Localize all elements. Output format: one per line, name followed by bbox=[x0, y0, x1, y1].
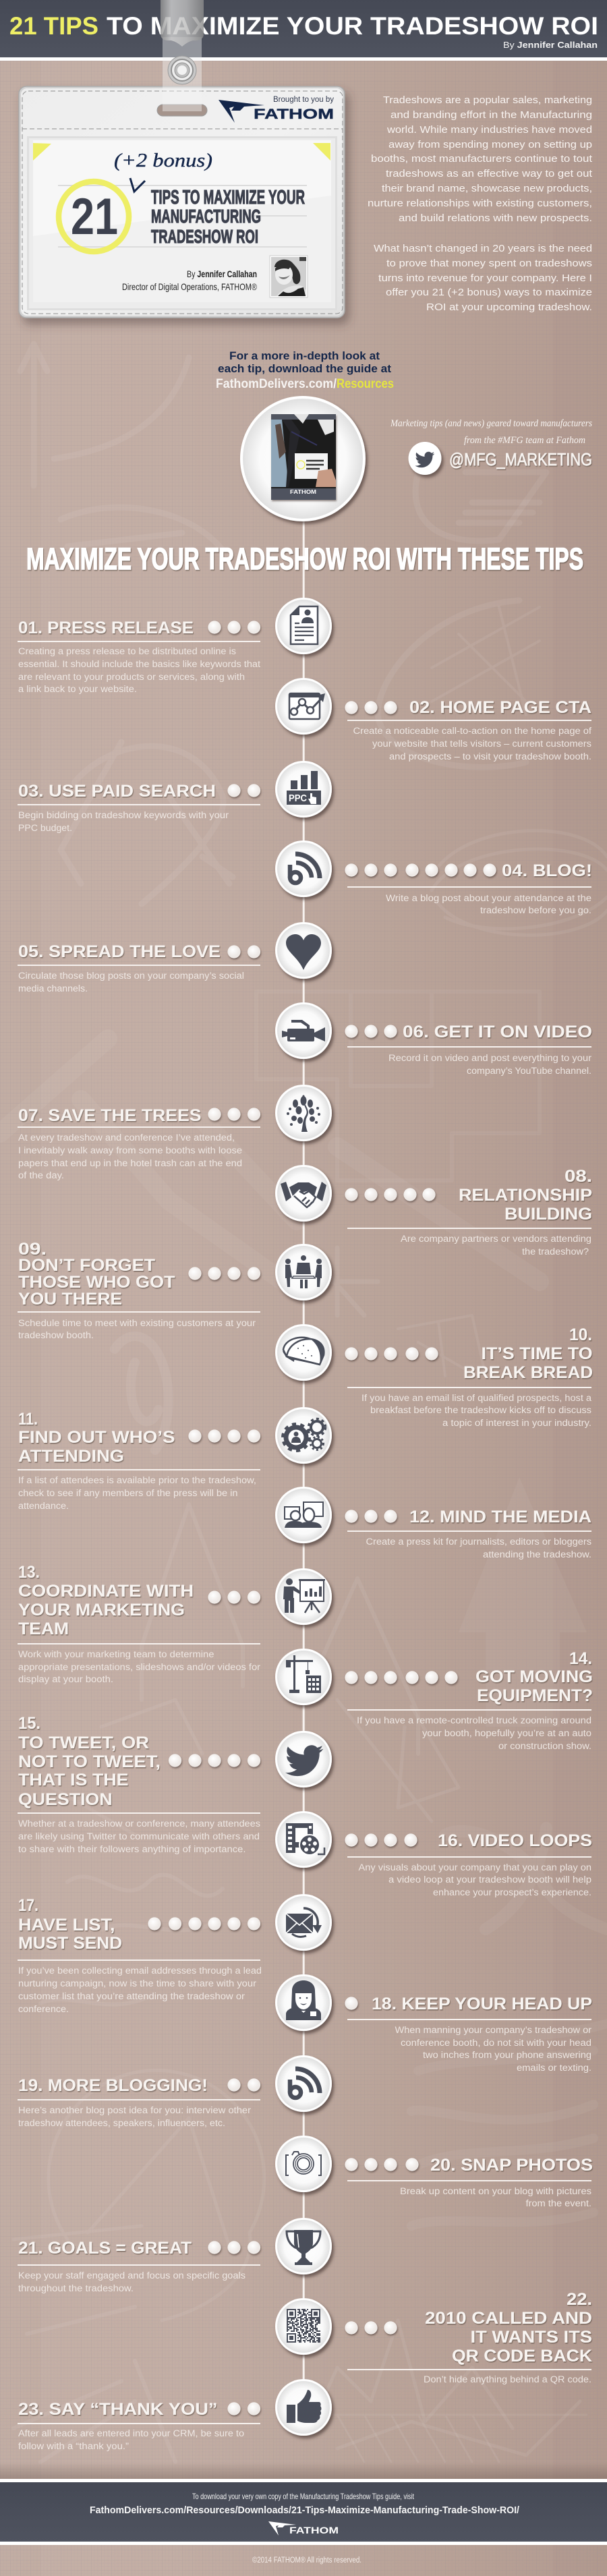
heading: NOT TO TWEET, bbox=[18, 1752, 161, 1771]
description: are likely using Twitter to communicate with others and bbox=[18, 1831, 260, 1841]
tip 03 bbox=[18, 761, 332, 833]
footer note: To download your very own copy of the Manufacturing Tradeshow Tips guide, visit bbox=[192, 2492, 415, 2501]
description bbox=[357, 1715, 591, 1751]
heading bbox=[18, 1563, 194, 1638]
twitter callout: from the #MFG team at Fathom bbox=[464, 435, 585, 446]
header bar bbox=[0, 0, 607, 61]
heading: 06. GET IT ON VIDEO bbox=[403, 1023, 592, 1041]
tip 05 bbox=[18, 922, 332, 994]
description bbox=[18, 1966, 262, 2014]
heading: 14. bbox=[569, 1649, 592, 1668]
description: enhance your prospect’s experience. bbox=[433, 1887, 591, 1897]
intro copy bbox=[368, 94, 593, 313]
description bbox=[401, 1234, 591, 1257]
description: your booth, hopefully you’re at an auto bbox=[422, 1728, 591, 1738]
author bbox=[122, 268, 258, 292]
description: When manning your company’s tradeshow or bbox=[395, 2025, 592, 2035]
heading: THAT IS THE bbox=[18, 1771, 128, 1790]
description: display at your booth. bbox=[18, 1674, 113, 1684]
description: Whether at a tradeshow or conference, many attendees bbox=[18, 1819, 260, 1829]
icon: thumbs up bbox=[275, 2379, 332, 2436]
heading: HAVE LIST, bbox=[18, 1916, 115, 1935]
central timeline line bbox=[303, 519, 305, 2408]
heading bbox=[18, 1714, 161, 1809]
description: Create a press kit for journalists, editors or bloggers bbox=[366, 1537, 591, 1547]
description: a link back to your website. bbox=[18, 684, 137, 694]
guide cover image: FATHOM bbox=[290, 489, 316, 495]
icon: presenter bbox=[275, 1568, 332, 1625]
tip 15 bbox=[18, 1714, 332, 1854]
tip 17 bbox=[18, 1894, 332, 2014]
dots bbox=[345, 2321, 397, 2335]
heading: 09. bbox=[18, 1240, 47, 1259]
description: appropriate presentations, slideshows and/or videos for bbox=[18, 1662, 261, 1672]
heading bbox=[18, 1410, 175, 1466]
sponsor logo: Brought to you by bbox=[273, 96, 334, 104]
heading: GOT MOVING bbox=[475, 1667, 593, 1686]
description bbox=[18, 2105, 252, 2128]
icon: photo camera bbox=[275, 2136, 332, 2192]
heading: 13. bbox=[18, 1563, 40, 1582]
heading: TEAM bbox=[18, 1620, 69, 1638]
dots bbox=[227, 784, 260, 797]
card heading: MANUFACTURING bbox=[151, 206, 261, 227]
intro copy: booths, most manufacturers continue to tout bbox=[371, 153, 593, 165]
tip 09 bbox=[18, 1240, 332, 1340]
description: your website that tells visitors – current customers bbox=[372, 739, 591, 749]
description: media channels. bbox=[18, 983, 88, 994]
description: or construction show. bbox=[498, 1741, 591, 1751]
heading: 03. USE PAID SEARCH bbox=[18, 782, 216, 801]
description: Work with your marketing team to determine bbox=[18, 1649, 214, 1659]
intro copy: What hasn’t changed in 20 years is the need bbox=[374, 243, 592, 254]
heading: 02. HOME PAGE CTA bbox=[409, 698, 591, 717]
tip 14 bbox=[275, 1649, 593, 1751]
description: to share with their followers anything of importance. bbox=[18, 1844, 245, 1854]
description bbox=[386, 893, 591, 915]
description bbox=[18, 1649, 261, 1684]
dots bbox=[345, 1347, 438, 1361]
byline: By Jennifer Callahan bbox=[503, 40, 598, 50]
heading: 20. SNAP PHOTOS bbox=[430, 2156, 593, 2175]
copyright: ©2014 FATHOM® All rights reserved. bbox=[252, 2556, 362, 2565]
title: TO MAXIMIZE YOUR TRADESHOW ROI bbox=[107, 11, 598, 40]
description: check to see if any members of the press will be in bbox=[18, 1488, 237, 1498]
tip 01 bbox=[18, 598, 332, 694]
description: company’s YouTube channel. bbox=[467, 1066, 591, 1076]
footer logo bbox=[268, 2521, 339, 2536]
description: a video loop at your tradeshow booth will help bbox=[388, 1874, 591, 1885]
heading bbox=[18, 1896, 122, 1953]
author: Director of Digital Operations, FATHOM® bbox=[122, 281, 258, 292]
description: papers that end up in the hotel trash can at the end bbox=[18, 1158, 242, 1168]
description bbox=[18, 1475, 256, 1511]
heading: 05. SPREAD THE LOVE bbox=[18, 942, 221, 961]
icon: blog bbox=[275, 840, 332, 897]
intro copy: turns into revenue for your company. Here I bbox=[378, 273, 592, 284]
heading bbox=[475, 1649, 593, 1705]
heading: ATTENDING bbox=[18, 1447, 124, 1466]
description: Record it on video and post everything to your bbox=[388, 1053, 592, 1063]
description: emails or texting. bbox=[517, 2063, 591, 2073]
heading: 07. SAVE THE TREES bbox=[18, 1106, 201, 1125]
icon: press release bbox=[275, 598, 332, 654]
tip 11 bbox=[18, 1407, 332, 1511]
dots bbox=[227, 2402, 260, 2415]
tip 20 bbox=[275, 2136, 593, 2208]
heading: COORDINATE WITH bbox=[18, 1582, 194, 1601]
intro copy: offer you 21 (+2 bonus) ways to maximize bbox=[386, 287, 592, 298]
icon: crane bbox=[275, 1649, 332, 1705]
heading: 2010 CALLED AND bbox=[425, 2309, 592, 2328]
handwritten note: (+2 bonus) bbox=[114, 150, 212, 171]
description: PPC budget. bbox=[18, 823, 72, 833]
description: tradeshow attendees, speakers, influencers, etc. bbox=[18, 2118, 225, 2128]
icon: bread bbox=[275, 1324, 332, 1381]
heading: 19. MORE BLOGGING! bbox=[18, 2076, 208, 2095]
number ring bbox=[59, 181, 129, 252]
tip 06 bbox=[275, 1002, 592, 1076]
description bbox=[18, 2270, 245, 2293]
tip 18 bbox=[275, 1974, 592, 2073]
intro copy: Tradeshows are a popular sales, marketing bbox=[383, 94, 592, 106]
card insert bbox=[27, 136, 337, 310]
description bbox=[18, 646, 260, 694]
lanyard clip bbox=[161, 0, 204, 111]
description bbox=[366, 1537, 591, 1559]
heading: IT WANTS ITS bbox=[471, 2328, 592, 2347]
description bbox=[395, 2025, 592, 2073]
icon: film reel bbox=[275, 1811, 332, 1868]
description bbox=[18, 2428, 244, 2451]
heading: 10. bbox=[569, 1325, 592, 1344]
tip 02 bbox=[275, 678, 591, 762]
heading: TO TWEET, OR bbox=[18, 1734, 149, 1752]
intro copy: tradeshows as an effective way to get out bbox=[386, 168, 593, 179]
intro copy: to prove that money spent on tradeshows bbox=[386, 258, 592, 269]
description: conference booth, do not sit with your head bbox=[401, 2038, 591, 2048]
heading: 11. bbox=[18, 1410, 38, 1429]
description bbox=[18, 971, 244, 994]
description: customer list that you’re attending the tradeshow or bbox=[18, 1991, 245, 2001]
sponsor logo bbox=[219, 96, 334, 123]
description: attendance. bbox=[18, 1501, 69, 1511]
heading bbox=[463, 1325, 593, 1382]
description: Create a noticeable call-to-action on the home page of bbox=[353, 726, 591, 736]
heading: YOU THERE bbox=[18, 1290, 122, 1309]
intro copy: and branding effort in the Manufacturing bbox=[391, 109, 592, 121]
icon: PPC: PPC bbox=[289, 793, 307, 804]
dots bbox=[345, 1510, 397, 1523]
badge slot bbox=[157, 105, 207, 116]
icon: QR code bbox=[275, 2298, 332, 2355]
icon: PPC bbox=[275, 761, 332, 818]
tip 21 bbox=[18, 2218, 332, 2293]
footer logo: FATHOM bbox=[289, 2525, 339, 2536]
title: 21 TIPS bbox=[9, 11, 98, 40]
description bbox=[353, 726, 591, 762]
tip 13 bbox=[18, 1563, 332, 1684]
description bbox=[388, 1053, 592, 1076]
twitter callout bbox=[390, 418, 592, 475]
description bbox=[18, 810, 229, 833]
dots bbox=[188, 1429, 260, 1443]
intro copy: ROI at your upcoming tradeshow. bbox=[426, 302, 592, 313]
intro copy: and build relations with new prospects. bbox=[399, 212, 592, 224]
heading: 08. bbox=[565, 1167, 592, 1186]
description: attending the tradeshow. bbox=[483, 1549, 591, 1559]
description bbox=[400, 2186, 591, 2208]
heading: 22. bbox=[567, 2290, 592, 2309]
heading: 01. PRESS RELEASE bbox=[18, 619, 194, 637]
guide download prompt: For a more in-depth look at bbox=[229, 350, 380, 362]
snap button bbox=[168, 56, 196, 84]
heading: QR CODE BACK bbox=[452, 2347, 592, 2366]
description bbox=[359, 1862, 591, 1897]
dots bbox=[345, 1833, 417, 1847]
heading: 04. BLOG! bbox=[502, 861, 592, 880]
icon: gears bbox=[275, 1407, 332, 1464]
sponsor logo: FATHOM bbox=[254, 107, 334, 122]
tip 22 bbox=[275, 2290, 592, 2384]
guide download prompt: Resources bbox=[337, 377, 394, 391]
dots bbox=[345, 863, 496, 877]
guide download prompt: FathomDelivers.com/ bbox=[216, 377, 337, 391]
description: Don’t hide anything behind a QR code. bbox=[424, 2374, 591, 2384]
tip 16 bbox=[275, 1811, 592, 1897]
description: Here’s another blog post idea for you: interview other bbox=[18, 2105, 252, 2115]
intro copy: nurture relationships with existing customers, bbox=[368, 198, 592, 209]
card heading: TIPS TO MAXIMIZE YOUR bbox=[151, 187, 305, 208]
description: nurturing campaign, now is the time to share with your bbox=[18, 1978, 257, 1988]
description: Begin bidding on tradeshow keywords with your bbox=[18, 810, 229, 820]
description: If you have an email list of qualified prospects, host a bbox=[362, 1393, 592, 1403]
icon: handshake bbox=[275, 1165, 332, 1222]
footer bar bbox=[0, 2479, 607, 2545]
dots bbox=[345, 1997, 358, 2010]
icon: twitter bbox=[409, 442, 441, 475]
description bbox=[362, 1393, 592, 1428]
dots bbox=[148, 1917, 260, 1930]
dots bbox=[169, 1754, 260, 1767]
footer link: FathomDelivers.com/Resources/Downloads/21-Tips-Maximize-Manufacturing-Trade-Show-ROI/ bbox=[90, 2505, 520, 2516]
heading bbox=[18, 1240, 175, 1309]
heading: 15. bbox=[18, 1714, 40, 1733]
heading: 12. MIND THE MEDIA bbox=[409, 1508, 591, 1526]
icon: email loop bbox=[275, 1894, 332, 1951]
dots bbox=[208, 621, 260, 634]
check caret bbox=[130, 178, 145, 192]
heading: 17. bbox=[18, 1896, 38, 1915]
heading: 23. SAY “THANK YOU” bbox=[18, 2400, 218, 2419]
description: Schedule time to meet with existing customers at your bbox=[18, 1318, 256, 1328]
description: throughout the tradeshow. bbox=[18, 2283, 134, 2293]
heading: 18. KEEP YOUR HEAD UP bbox=[372, 1995, 592, 2013]
heading: QUESTION bbox=[18, 1790, 112, 1809]
dots bbox=[345, 1671, 458, 1684]
heading: IT’S TIME TO bbox=[482, 1344, 592, 1363]
description: If you have a remote-controlled truck zooming around bbox=[357, 1715, 591, 1725]
tip 10 bbox=[275, 1324, 593, 1428]
card heading: TRADESHOW ROI bbox=[151, 226, 258, 247]
guide cover image bbox=[271, 414, 336, 500]
tip 04 bbox=[275, 840, 592, 915]
dots bbox=[208, 1108, 260, 1121]
dots bbox=[227, 2078, 260, 2092]
heading bbox=[459, 1167, 592, 1224]
dots bbox=[227, 945, 260, 958]
icon: woman with badge bbox=[275, 1974, 332, 2031]
description: a topic of interest in your industry. bbox=[442, 1418, 591, 1428]
dots bbox=[345, 701, 397, 714]
description: and prospects – to visit your tradeshow booth. bbox=[389, 751, 591, 762]
dots bbox=[345, 1188, 436, 1201]
dots bbox=[208, 2241, 260, 2254]
intro copy: away from spending money on setting up bbox=[388, 139, 592, 150]
icon: meeting bbox=[275, 1244, 332, 1300]
description: tradeshow before you go. bbox=[480, 905, 591, 915]
description: follow with a “thank you.” bbox=[18, 2441, 129, 2451]
icon: blog bbox=[275, 2055, 332, 2112]
description bbox=[18, 1133, 242, 1180]
icon: home page analytics bbox=[275, 678, 332, 735]
description: Any visuals about your company that you can play on bbox=[359, 1862, 591, 1872]
description: At every tradeshow and conference I’ve attended, bbox=[18, 1133, 235, 1143]
heading: BREAK BREAD bbox=[463, 1363, 593, 1382]
description: After all leads are entered into your CRM, be sure to bbox=[18, 2428, 244, 2438]
tip 08 bbox=[275, 1165, 592, 1257]
heading: THOSE WHO GOT bbox=[18, 1273, 175, 1292]
number ring: 21 bbox=[71, 188, 118, 246]
tip 23 bbox=[18, 2379, 332, 2451]
description bbox=[18, 1819, 260, 1854]
tip 19 bbox=[18, 2055, 332, 2128]
heading: BUILDING bbox=[504, 1205, 592, 1224]
dots bbox=[345, 2158, 419, 2171]
description: are relevant to your products or services, along with bbox=[18, 672, 245, 682]
author photo bbox=[270, 256, 308, 297]
dots bbox=[188, 1267, 260, 1280]
description: the tradeshow? bbox=[522, 1247, 589, 1257]
heading: MUST SEND bbox=[18, 1934, 122, 1953]
intro copy: their brand name, showcase new products, bbox=[382, 183, 592, 194]
description bbox=[18, 1318, 256, 1340]
icon: tree bbox=[275, 1085, 332, 1141]
name badge bbox=[19, 86, 345, 318]
heading bbox=[425, 2290, 592, 2366]
heading: FIND OUT WHO’S bbox=[18, 1428, 175, 1447]
guide download prompt: each tip, download the guide at bbox=[218, 363, 392, 375]
heading: YOUR MARKETING bbox=[18, 1601, 185, 1620]
intro copy: world. While many industries have moved bbox=[386, 124, 592, 136]
description: from the event. bbox=[526, 2198, 591, 2208]
heading: DON’T FORGET bbox=[18, 1256, 155, 1275]
heading: RELATIONSHIP bbox=[459, 1186, 592, 1205]
dots bbox=[345, 1025, 397, 1038]
description: Write a blog post about your attendance at the bbox=[386, 893, 591, 903]
description: conference. bbox=[18, 2004, 69, 2014]
description: breakfast before the tradeshow kicks off to discuss bbox=[370, 1405, 591, 1415]
heading: EQUIPMENT? bbox=[477, 1686, 593, 1705]
guide cover disc bbox=[240, 396, 366, 521]
description: two inches from your phone answering bbox=[423, 2050, 591, 2060]
description: If you’ve been collecting email addresses through a lead bbox=[18, 1966, 262, 1976]
author: By Jennifer Callahan bbox=[187, 268, 257, 279]
icon: heart bbox=[275, 922, 332, 979]
icon: twitter bird bbox=[275, 1731, 332, 1787]
description: of the day. bbox=[18, 1170, 64, 1180]
description: Keep your staff engaged and focus on specific goals bbox=[18, 2270, 245, 2281]
description: I inevitably walk away from some booths with loose bbox=[18, 1145, 242, 1155]
icon: media people bbox=[275, 1487, 332, 1543]
description: Break up content on your blog with pictures bbox=[400, 2186, 591, 2196]
heading: 16. VIDEO LOOPS bbox=[438, 1831, 592, 1850]
tip 07 bbox=[18, 1085, 332, 1180]
description: Circulate those blog posts on your company’s social bbox=[18, 971, 244, 981]
guide download prompt bbox=[216, 350, 394, 391]
card heading bbox=[151, 187, 305, 247]
icon: trophy bbox=[275, 2218, 332, 2274]
tip 12 bbox=[275, 1487, 591, 1559]
dots bbox=[208, 1591, 260, 1604]
icon: video camera bbox=[275, 1002, 332, 1059]
description: Creating a press release to be distributed online is bbox=[18, 646, 236, 656]
heading: 21. GOALS = GREAT bbox=[18, 2239, 192, 2258]
description: essential. It should include the basics like keywords that bbox=[18, 659, 260, 669]
description: Are company partners or vendors attending bbox=[401, 1234, 591, 1244]
description: tradeshow booth. bbox=[18, 1330, 94, 1340]
description: If a list of attendees is available prior to the tradeshow, bbox=[18, 1475, 256, 1485]
